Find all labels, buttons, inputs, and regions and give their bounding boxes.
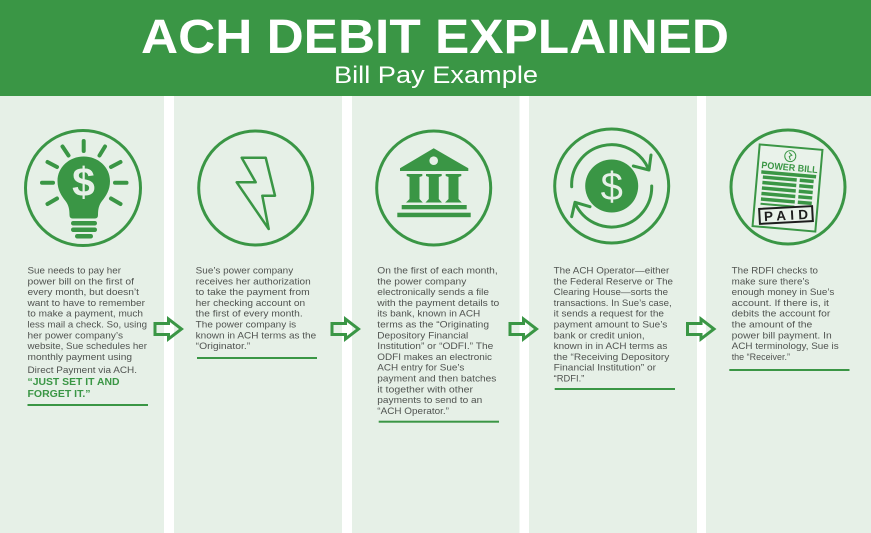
icon: light bulb with dollar [26,130,140,246]
text: step 1: Sue needs to pay her [28,266,121,276]
icon: paid power bill [731,130,845,244]
text: step 2 [196,266,316,351]
text: step 3: the power company [377,276,467,286]
icon: lightning bolt [199,131,313,245]
panel: step 1 background [0,96,164,533]
text: step 4: it sends a request for the [554,309,664,319]
text: step 4 [554,266,673,384]
text: step 5: make sure there’s [732,276,810,286]
text: step 5: The RDFI checks to [732,266,818,276]
icon: light bulb with dollar: $ [72,159,95,205]
text: step 1: want to have to remember [26,298,145,308]
text: step 3: its bank, known in ACH [377,309,480,319]
text: step 3: “ACH Operator.” [377,406,449,416]
text: step 4: “RDFI.” [554,374,584,384]
text: step 4: Clearing House—sorts the [554,287,668,297]
text: step 4: Financial Institution” or [554,363,656,373]
callout: just set it and forget it: “JUST SET IT AND [28,377,120,388]
text: step 1: her power company’s [28,330,123,340]
text: step 2: to take the payment from [196,287,310,297]
text: step 5: the “Receiver.” [732,352,790,362]
panel: step 3 background [352,96,520,533]
text: step 5: enough money in Sue’s [732,287,835,297]
text: step 3: ODFI makes an electronic [377,352,492,362]
text: step 4: The ACH Operator—either [554,266,669,276]
text: step 3: On the first of each month, [377,266,498,276]
text: step 5 [732,266,839,362]
text: step 1: to make a payment, much [28,309,143,319]
text: step 2: the first of every month. [196,309,303,319]
header banner [0,0,871,96]
panel: step 2 background [174,96,342,533]
arrow: step 1 to 2 [155,319,182,339]
text: step 3 [376,266,499,416]
text: step 2: known in ACH terms as the [196,330,316,340]
icon: bank building [377,131,491,245]
text: step 4: known in in ACH terms as [554,341,668,351]
text: step 2: her checking account on [196,298,305,308]
text: step 3: it together with other [377,384,473,394]
arrow: step 2 to 3 [332,319,358,339]
text: step 1: website, Sue schedules her [26,341,147,351]
title: ACH DEBIT EXPLAINED [141,11,729,64]
text: step 2: The power company is [196,320,297,330]
callout: just set it and forget it [28,377,120,400]
icon: paid power bill: PAID [764,207,809,224]
text: step 4: bank or credit union, [554,330,645,340]
text: step 1: monthly payment using [28,352,132,362]
text: step 4: transactions. In Sue’s case, [554,298,672,308]
text: step 4: the “Receiving Depository [554,352,670,362]
icon: dollar with circular arrows [555,129,669,243]
subtitle: Bill Pay Example [334,62,538,89]
text: step 1 [26,266,147,375]
text: step 3: payment and then batches [377,374,497,384]
text: step 5: debits the account for [732,309,830,319]
text: step 3: Institution” or “ODFI.” The [377,341,493,351]
icon: dollar with circular arrows: $ [601,165,623,209]
text: step 3: Depository Financial [377,330,468,340]
arrow: step 3 to 4 [510,319,536,339]
text: step 3: ACH entry for Sue’s [377,363,465,373]
text: step 5: ACH terminology, Sue is [732,341,839,351]
text: step 3: payments to send to an [377,395,482,405]
text: step 5: account. If there is, it [732,298,829,308]
text: step 4: the Federal Reserve or The [554,276,673,286]
text: step 3: terms as the “Originating [377,320,489,330]
icon: paid power bill: POWER BILL [761,160,818,176]
text: step 5: power bill payment. In [732,330,832,340]
text: step 1: less mail a check. So, using [28,320,147,330]
text: step 2: “Originator.” [196,341,250,351]
text: step 4: payment amount to Sue’s [554,320,668,330]
text: step 1: Direct Payment via ACH. [28,365,137,375]
arrow: step 4 to 5 [688,319,714,339]
text: step 3: electronically sends a file [377,287,489,297]
text: step 1: every month, but doesn’t [28,287,139,297]
panel: step 5 background [706,96,871,533]
callout: just set it and forget it: FORGET IT.” [28,389,90,400]
panel: step 4 background [529,96,697,533]
text: step 3: with the payment details to [376,298,499,308]
text: step 5: the amount of the [732,320,812,330]
text: step 2: receives her authorization [196,276,311,286]
text: step 1: power bill on the first of [28,276,134,286]
text: step 2: Sue’s power company [196,266,294,276]
